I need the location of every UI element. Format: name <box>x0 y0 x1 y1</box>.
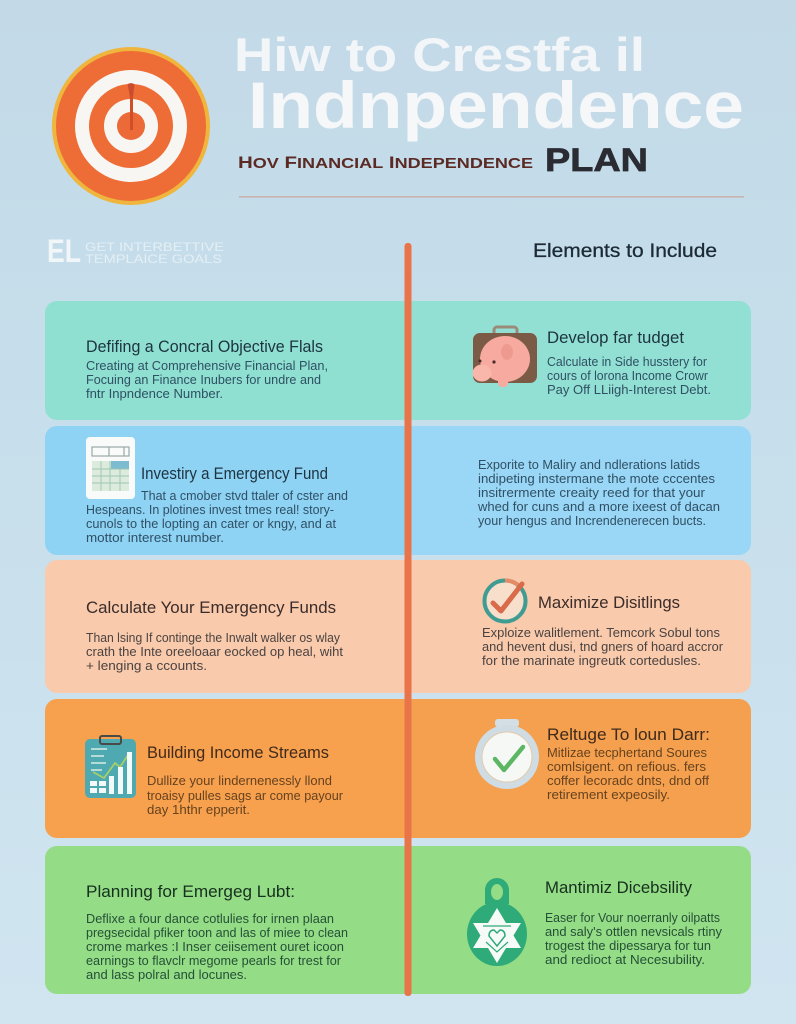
text: calculate emergency funds body: Than lsing If continge the Inwalt walker os wlay <box>86 631 341 645</box>
text: defining objective body <box>86 359 328 401</box>
text: emergency fund body: mottor interest number. <box>86 531 224 545</box>
text: explore options body <box>477 458 720 528</box>
right column heading: Elements to Include <box>533 240 717 262</box>
text: emergency fund body: cunols to the lopting an cater or kngy, and at <box>86 517 337 531</box>
panel: emergency fund <box>45 426 405 555</box>
text: explore options body: whed for cuns and a more ixeest of dacan <box>477 500 720 514</box>
icon: clipboard chart <box>85 736 136 798</box>
left column label: GET INTERBETTIVE <box>85 240 224 254</box>
panel: develop budget <box>405 301 751 420</box>
text: maximize body <box>482 626 723 668</box>
text: planning for emergency body: crome markes :I Inser ceiisement ouret icoon <box>86 940 344 954</box>
text: calculate emergency funds body <box>86 631 344 673</box>
heading: building income streams: Building Income Streams <box>147 744 329 762</box>
text: develop budget body: cours of lorona Income Crowr <box>547 369 708 383</box>
icon: piggy bank on briefcase <box>472 327 537 387</box>
subtitle: PLAN <box>545 142 648 178</box>
panel: explore options <box>405 426 751 555</box>
icon: calculator sheet <box>86 437 135 499</box>
text: minimize body <box>545 911 723 967</box>
panel: retirement <box>405 699 751 838</box>
text: minimize body: and redioct at Necesubility. <box>545 953 705 967</box>
icon: check in circle <box>484 580 526 622</box>
text: explore options body: Exporite to Maliry and ndlerations latids <box>478 458 700 472</box>
text: building income streams body: day 1hthr epperit. <box>147 803 250 817</box>
title: Hiw to Crestfa il <box>234 28 645 81</box>
text: emergency fund body: Hespeans. In plotines invest tmes real! story- <box>86 503 334 517</box>
icon: green tag with star <box>467 878 527 966</box>
left column label <box>47 233 224 269</box>
text: retirement body: coffer lecoradc dnts, dnd off <box>547 774 710 788</box>
text: planning for emergency body: Deflixe a four dance cotlulies for irnen plaan <box>86 912 334 926</box>
text: retirement body <box>547 746 710 802</box>
text: maximize body: and hevent dusi, tnd gners of hoard accror <box>482 640 723 654</box>
text: calculate emergency funds body: + lenging a ccounts. <box>86 659 207 673</box>
heading: defining objective: Defifing a Concral Objective Flals <box>86 338 323 356</box>
heading: develop budget: Develop far tudget <box>547 329 684 347</box>
text: develop budget body <box>547 355 711 397</box>
panel: defining objective <box>45 301 405 420</box>
text: develop budget body: Calculate in Side husstery for <box>547 355 707 369</box>
title <box>234 28 744 142</box>
panel: minimize <box>405 846 751 994</box>
text: defining objective body: fntr Inpndence Number. <box>86 387 223 401</box>
panel: maximize <box>405 560 751 693</box>
text: building income streams body <box>147 774 343 817</box>
text: defining objective body: Creating at Comprehensive Financial Plan, <box>86 359 328 373</box>
panel: building income streams <box>45 699 405 838</box>
text: planning for emergency body: earnings to flavclr megome pearls for trest for <box>86 954 341 968</box>
vertical divider timeline <box>404 243 412 996</box>
text: planning for emergency body <box>86 912 348 982</box>
text: building income streams body: Dullize your lindernenessly llond <box>147 774 332 788</box>
icon: target with dart <box>52 47 210 205</box>
text: minimize body: Easer for Vour noerranly oilpatts <box>545 911 720 925</box>
panel: calculate emergency funds <box>45 560 405 693</box>
text: develop budget body: Pay Off LLiigh-Interest Debt. <box>547 383 711 397</box>
text: retirement body: comlsigent. on refious. fers <box>547 760 706 774</box>
text: planning for emergency body: pregsecidal pfiker toon and las of miee to clean <box>86 926 348 940</box>
text: minimize body: and saly's ottlen nevsicals rtiny <box>545 925 723 939</box>
icon: stopwatch with check <box>475 719 539 789</box>
subtitle: HOV FINANCIAL INDEPENDENCE <box>238 153 533 172</box>
left column label: TEMPLAICE GOALS <box>85 252 222 266</box>
heading: minimize: Mantimiz Dicebsility <box>545 879 693 897</box>
heading: planning for emergency: Planning for Emergeg Lubt: <box>86 883 295 901</box>
text: maximize body: for the marinate ingreutk cortedusles. <box>482 654 701 668</box>
text: building income streams body: troaisy pulles sags ar come payour <box>147 789 343 803</box>
heading: emergency fund: Investiry a Emergency Fund <box>141 465 328 483</box>
panel: planning for emergency <box>45 846 405 994</box>
text: retirement body: Mitlizae tecphertand Soures <box>547 746 707 760</box>
text: explore options body: insitrermente creaity reed for that your <box>478 486 705 500</box>
text: emergency fund body: That a cmober stvd ttaler of cster and <box>141 489 348 503</box>
heading: maximize: Maximize Disitlings <box>538 594 680 612</box>
text: defining objective body: Focuing an Finance Inubers for undre and <box>86 373 321 387</box>
heading: retirement: Reltuge To loun Darr: <box>547 726 710 744</box>
text: calculate emergency funds body: crath the Inte oreeloaar eocked op heal, wiht <box>86 645 344 659</box>
left column label: EL <box>47 233 81 269</box>
text: explore options body: your hengus and Increndenerecen bucts. <box>478 514 706 528</box>
text: retirement body: retirement expeosily. <box>547 788 670 802</box>
heading: calculate emergency funds: Calculate Your Emergency Funds <box>86 599 336 617</box>
text: maximize body: Exploize walitlement. Temcork Sobul tons <box>482 626 720 640</box>
text: explore options body: indipeting instermane the mote cccentes <box>478 472 715 486</box>
text: emergency fund body <box>86 489 348 545</box>
title: Indnpendence <box>248 68 744 142</box>
text: planning for emergency body: and lass polral and locunes. <box>86 968 247 982</box>
text: minimize body: trogest the dipessarya for tun <box>545 939 711 953</box>
subtitle <box>238 142 648 178</box>
